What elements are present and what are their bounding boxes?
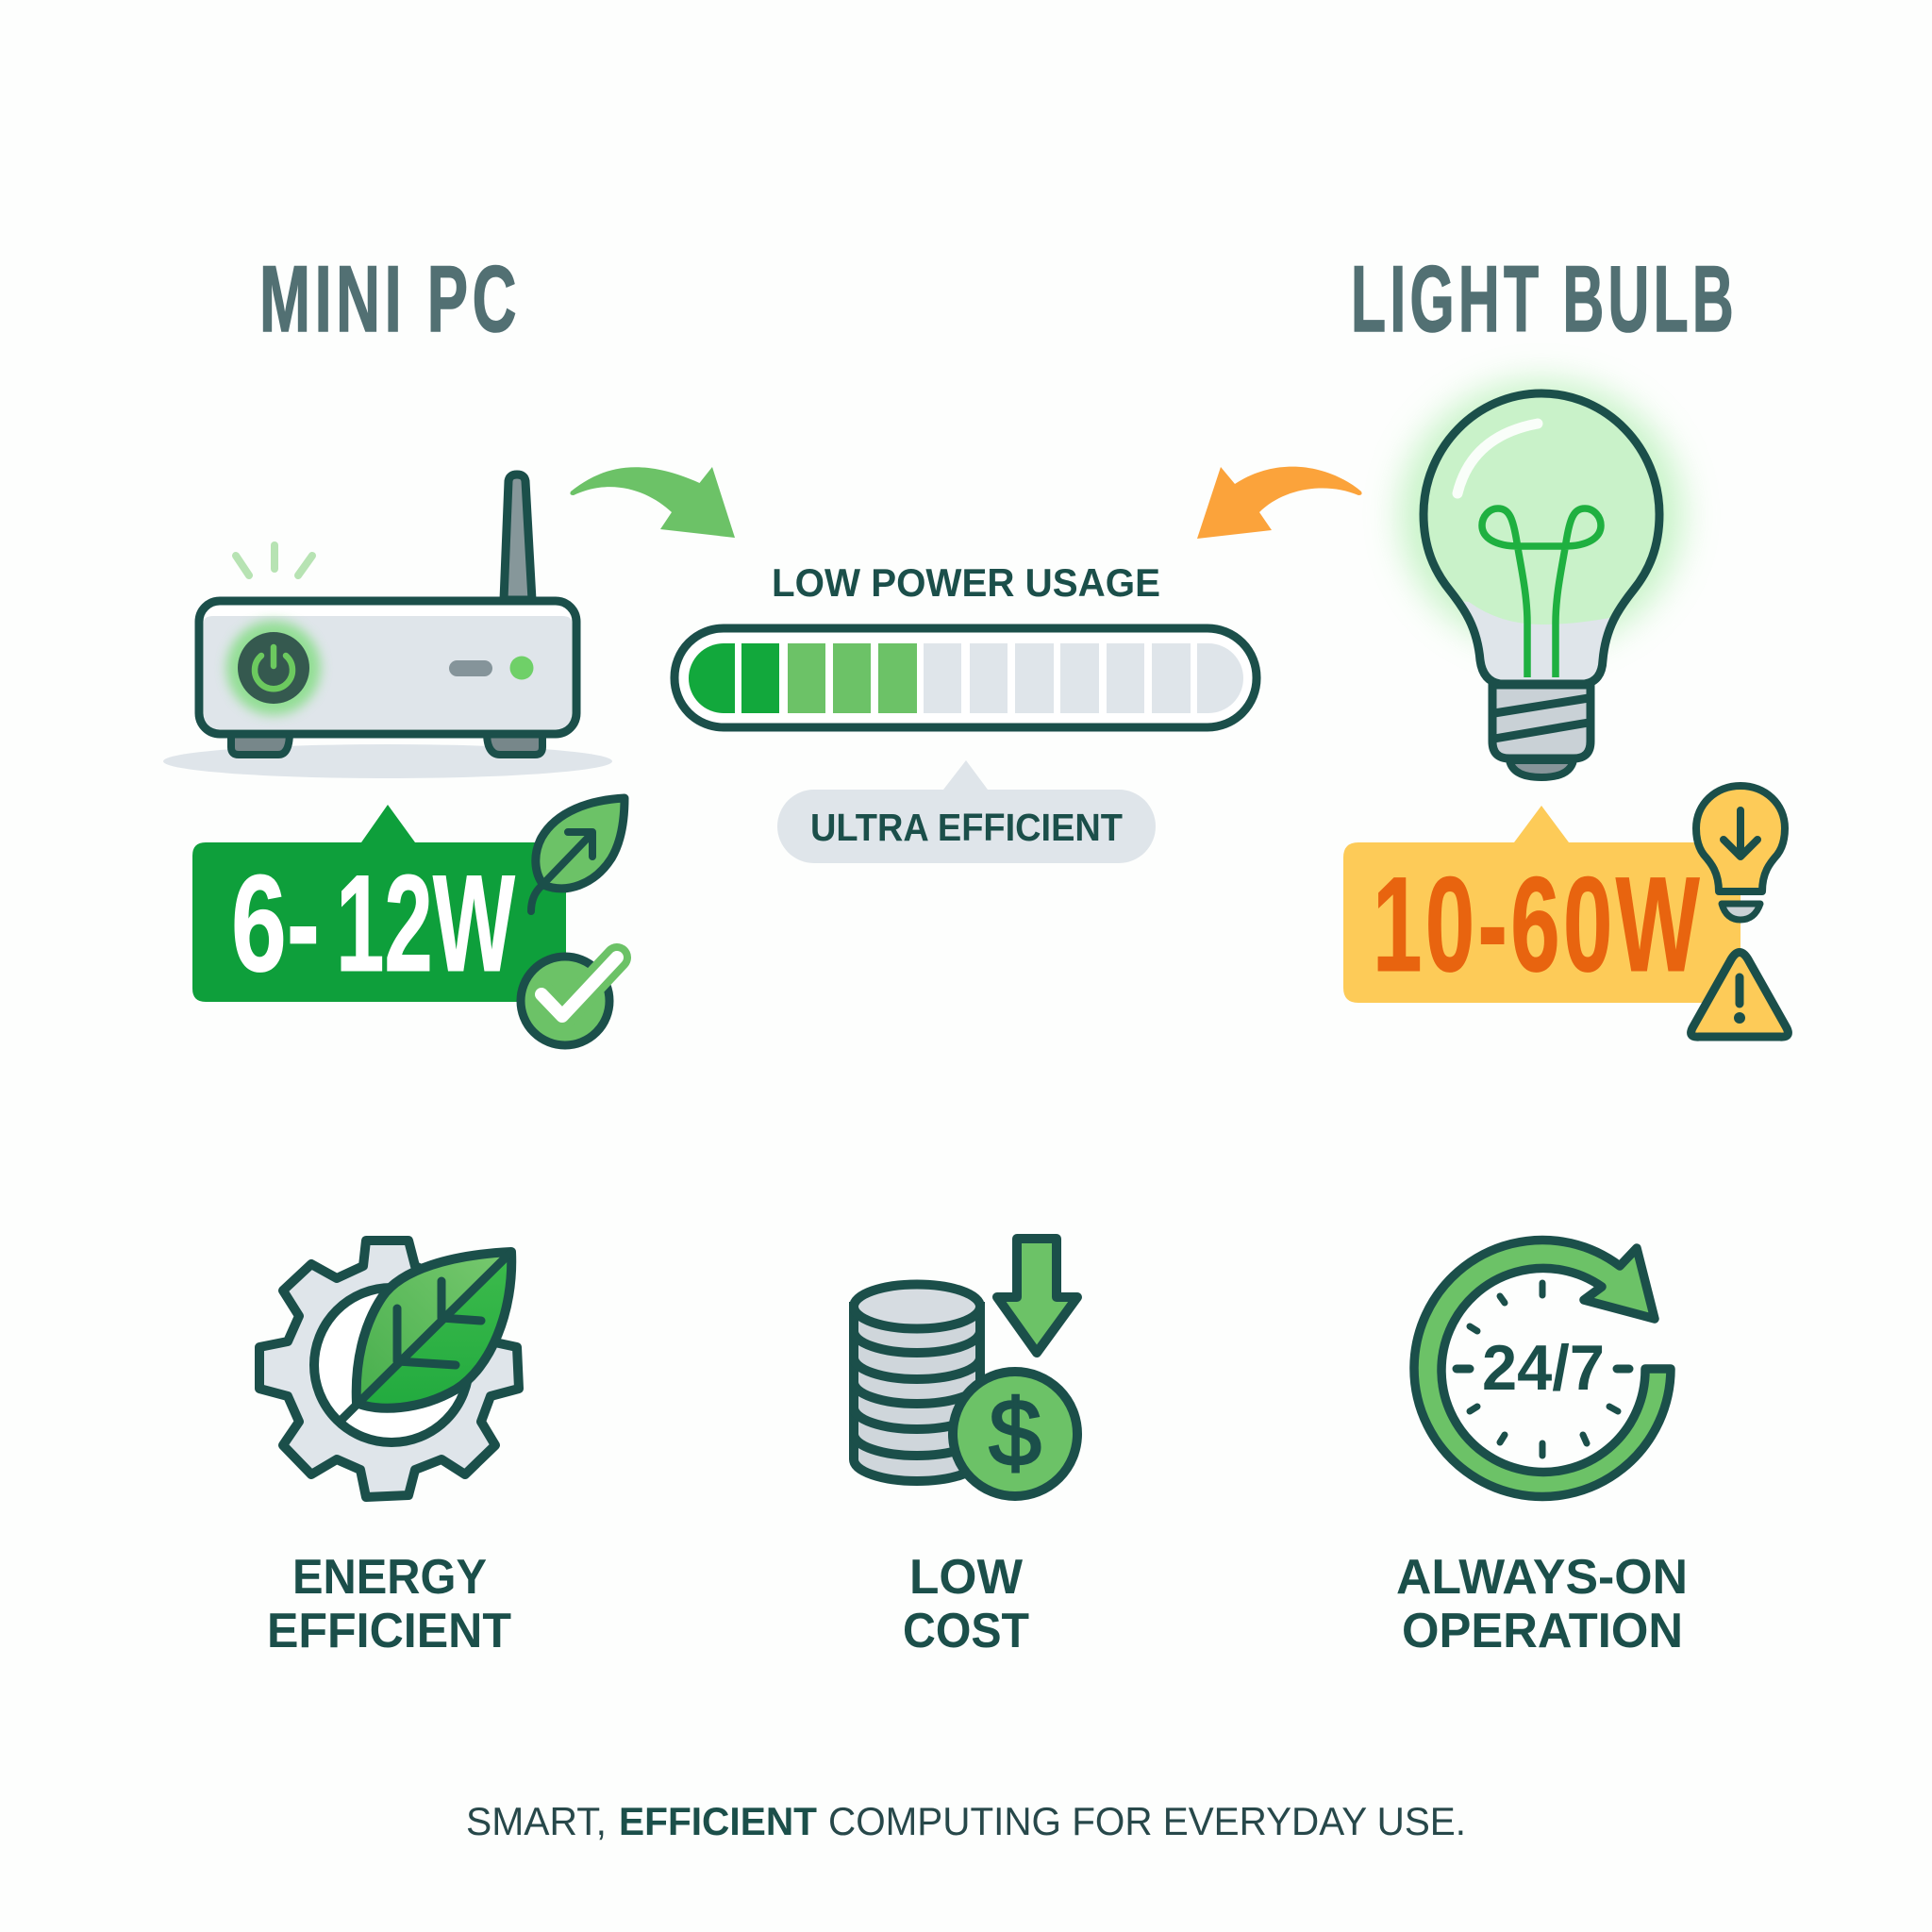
label: energy efficient: EFFICIENT <box>267 1604 511 1658</box>
badge: 6-12W: 6- <box>231 846 320 1000</box>
screw base <box>1492 685 1591 777</box>
bar frame <box>675 628 1257 727</box>
feet <box>231 732 542 755</box>
badge: 6-12W <box>192 805 566 1002</box>
badge: 6-12W: 12W <box>336 846 515 1000</box>
arrow: orange <box>1197 467 1362 539</box>
label: always-on operation: ALWAYS-ON <box>1396 1550 1688 1605</box>
shadow <box>163 744 612 778</box>
status pill and led <box>449 657 534 679</box>
coin stack <box>854 1285 980 1481</box>
label: always-on operation: OPERATION <box>1402 1604 1683 1658</box>
footer tagline <box>466 1799 1466 1843</box>
label: low cost: LOW <box>909 1550 1024 1605</box>
filled segments <box>689 643 917 713</box>
label: low cost <box>903 1550 1029 1658</box>
heading: low power usage: LOW POWER USAGE <box>772 560 1160 605</box>
badge: 10-60W: 10-60W <box>1373 850 1703 1000</box>
empty segments <box>924 643 1243 713</box>
filament <box>1482 508 1601 677</box>
highlight <box>1457 424 1538 493</box>
illustration: mini pc router <box>163 475 612 778</box>
label: energy efficient: ENERGY <box>292 1550 487 1605</box>
clock ticks <box>1457 1283 1629 1456</box>
glass <box>1419 389 1664 685</box>
icon: warning triangle <box>1691 953 1788 1037</box>
power usage bar <box>675 628 1257 727</box>
icon: 24/7 clock <box>1414 1240 1671 1496</box>
label: low cost: COST <box>903 1604 1029 1658</box>
icon: gear with leaf <box>259 1241 519 1497</box>
callout: ultra efficient: ULTRA EFFICIENT <box>810 806 1123 849</box>
label: always-on operation <box>1396 1550 1688 1658</box>
callout: ultra efficient <box>777 760 1156 863</box>
illustration: light bulb <box>1396 377 1689 777</box>
dollar coin: $ <box>989 1380 1041 1486</box>
24/7 text: 24/7 <box>1482 1332 1605 1404</box>
footer tagline: EFFICIENT <box>619 1799 817 1843</box>
icon: coins with dollar <box>854 1239 1077 1496</box>
antenna <box>504 475 532 600</box>
leaf <box>341 1252 511 1420</box>
footer tagline: COMPUTING FOR EVERYDAY USE. <box>828 1799 1466 1843</box>
badge: 10-60W <box>1343 806 1740 1003</box>
label: energy efficient <box>267 1550 511 1658</box>
dollar coin <box>953 1372 1077 1496</box>
down arrow <box>997 1239 1077 1353</box>
footer tagline: SMART, <box>466 1799 607 1843</box>
arrow: green <box>570 467 735 538</box>
activity sparks <box>236 545 312 575</box>
circular arrow <box>1414 1240 1671 1496</box>
heading: mini pc: MINI PC <box>259 246 521 351</box>
icon: leaf with arrow <box>531 798 625 911</box>
glow <box>1400 380 1683 648</box>
power button <box>226 621 321 715</box>
gear hole <box>314 1288 469 1442</box>
case <box>199 601 576 734</box>
gear <box>259 1241 519 1497</box>
icon: check badge <box>521 957 617 1045</box>
icon: small bulb with down arrow <box>1696 786 1785 920</box>
